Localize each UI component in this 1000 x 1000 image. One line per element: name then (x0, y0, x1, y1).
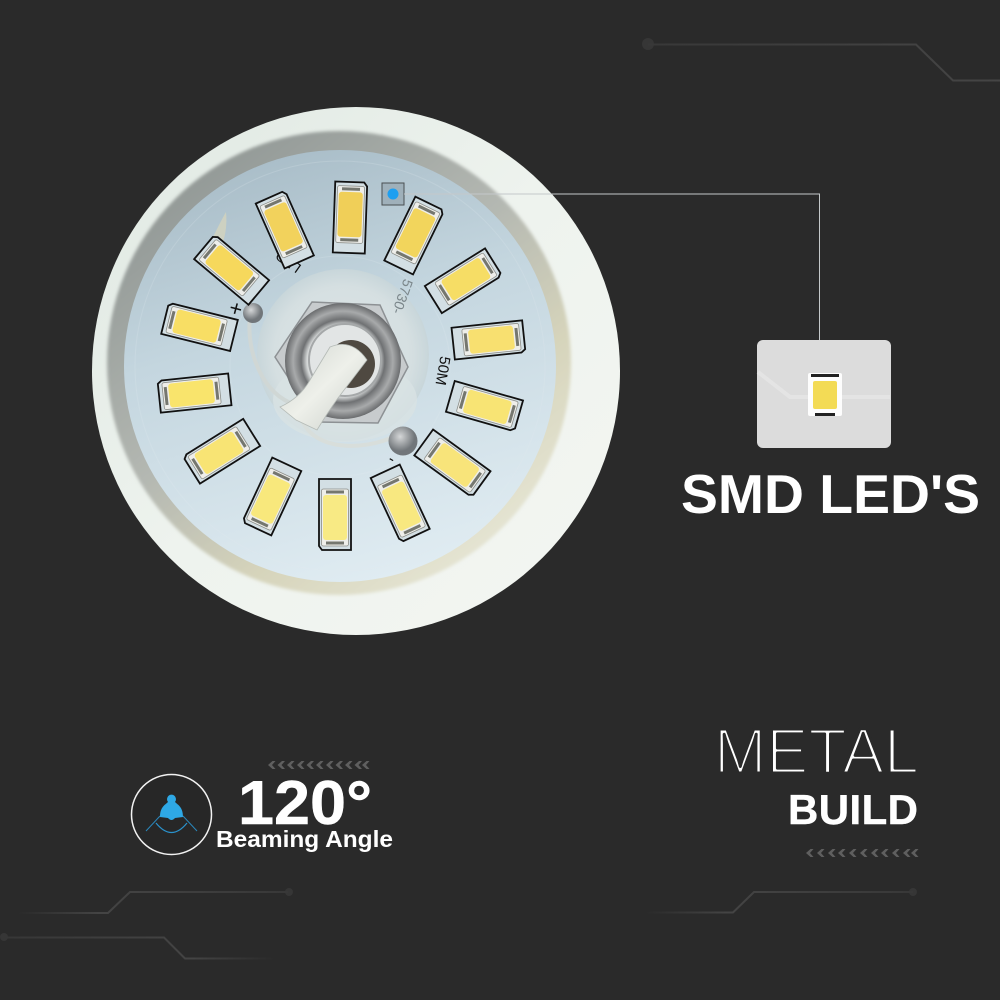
solder ball right (388, 426, 418, 456)
wire: right lead (302, 420, 393, 446)
board print marks: - (385, 451, 398, 468)
solder joint smear (208, 212, 226, 250)
wire: left lead (249, 318, 296, 405)
LED 6 (414, 429, 491, 497)
circuit line bottom right (645, 888, 917, 912)
chevrons under BUILD (806, 849, 918, 857)
callout marker (382, 183, 404, 205)
LED 2 (384, 197, 444, 274)
nut ring (285, 303, 401, 419)
circuit line top right (642, 38, 1000, 80)
stat: 120 degrees: 120° (238, 769, 372, 838)
insulated tube (280, 344, 367, 430)
hub lower glue (273, 358, 417, 442)
inner recess ring (107, 131, 571, 595)
hex nut (275, 302, 408, 423)
LED 14 (256, 191, 314, 268)
heading: METAL: METAL (714, 715, 919, 787)
LED 13 (194, 235, 269, 305)
board faint traces (135, 161, 545, 571)
board print marks: 5730- (389, 277, 416, 317)
board print marks: + (226, 295, 245, 322)
icon: beam angle (132, 774, 212, 854)
LED 4 (452, 320, 525, 360)
LED 1 (333, 181, 367, 254)
circuit line bottom left lower (0, 933, 275, 958)
LED 10 (183, 419, 260, 484)
hole (327, 340, 375, 388)
SMD LED detail card (757, 340, 891, 448)
board print marks: 50M (432, 355, 453, 387)
callout connector line (404, 194, 820, 340)
LED 12 (161, 303, 238, 351)
chevrons above 120 (268, 761, 370, 769)
board print marks: LED (272, 248, 304, 276)
solder ball left (243, 303, 263, 323)
circuit board (124, 150, 556, 582)
LED 7 (371, 465, 430, 542)
heading: BUILD: BUILD (788, 786, 918, 833)
LED 5 (446, 381, 523, 431)
LED 11 (158, 373, 231, 413)
circuit line bottom left upper (18, 888, 293, 913)
bulb photo: top view of LED board (92, 107, 620, 635)
translucent hub (257, 269, 429, 441)
LED 8 (319, 479, 351, 550)
washer (309, 324, 381, 396)
LED 3 (425, 248, 502, 313)
LED 9 (242, 458, 301, 535)
heading: SMD LED'S: SMD LED'S (681, 463, 980, 525)
outer white rim (92, 107, 620, 635)
stat label: Beaming Angle: Beaming Angle (216, 826, 393, 852)
board print marks (226, 248, 453, 468)
